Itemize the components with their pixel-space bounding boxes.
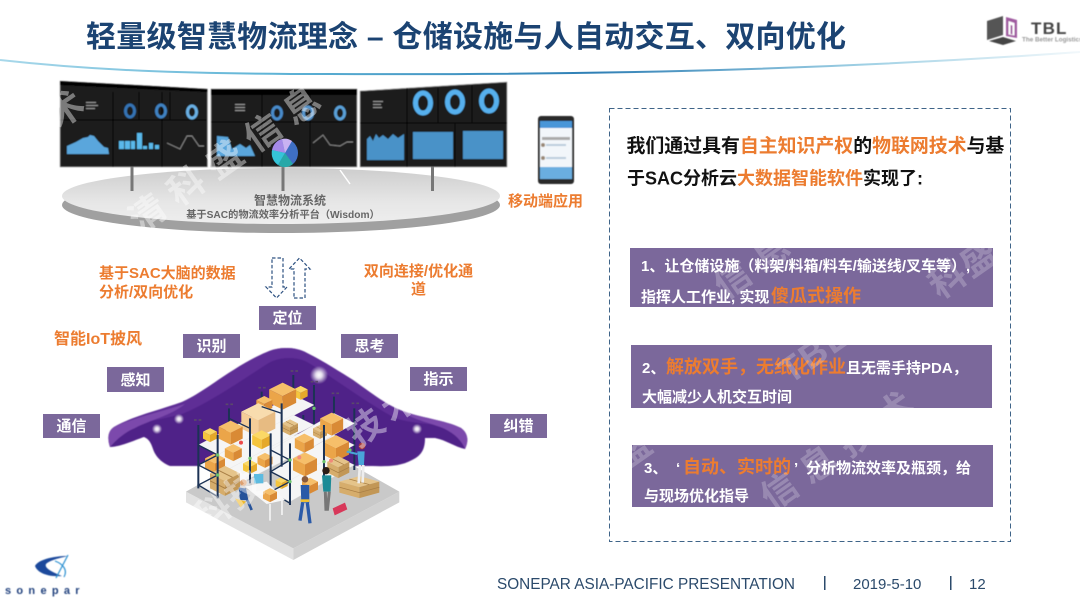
tag: sense [107, 367, 164, 392]
item 3: 与现场优化指导 [644, 487, 749, 505]
tag: correct: 纠错 [503, 418, 534, 435]
item 2 [631, 345, 992, 408]
header curved rule [0, 52, 1080, 74]
monitor: middle [211, 89, 357, 167]
callout: two-way connection: 双向连接/优化通 [364, 262, 473, 280]
logo: sonepar: sonepar [5, 585, 85, 597]
tag: correct [490, 414, 547, 438]
callout: two-way connection: 道 [411, 280, 426, 298]
monitor: right [360, 82, 507, 167]
illustration: warehouse [186, 371, 399, 560]
item 3 [632, 445, 993, 507]
watermark: 术 [39, 82, 92, 137]
arrow: dashed down [266, 258, 287, 298]
watermark: 技术 [339, 373, 431, 455]
warehouse floor [186, 432, 399, 560]
item 2: 解放双手，无纸化作业 [666, 356, 846, 377]
title: 轻量级智慧物流理念 – 仓储设施与人自动交互、双向优化 [86, 20, 846, 54]
icon: mobile phone [538, 116, 574, 184]
footer separators [824, 576, 952, 590]
tag: identify: 识别 [196, 338, 227, 355]
tag: positioning [259, 306, 316, 330]
item 1: 1、让仓储设施（料架/料箱/料车/输送线/叉车等）, [641, 257, 970, 275]
item 1: 傻瓜式操作 [771, 286, 861, 306]
item 3: 3、 [644, 460, 667, 477]
callout: SAC brain analysis: 基于SAC大脑的数据 [99, 264, 236, 282]
logo: TBL [987, 16, 1080, 45]
watermark: 信息技 [706, 192, 845, 307]
worker: blue overalls [300, 476, 310, 523]
item 3: ‘ [676, 460, 680, 477]
item 3: ’ [794, 460, 798, 477]
item 2: 且无需手持PDA， [846, 360, 968, 377]
panel intro text: 于SAC分析云大数据智能软件实现了: [627, 168, 923, 188]
panel: benefits [610, 108, 1010, 542]
watermark: 科盛 [921, 229, 1007, 307]
item 2: 大幅减少人机交互时间 [642, 388, 792, 406]
platform caption [186, 192, 380, 221]
rack: front posts and braces [194, 371, 360, 505]
watermark: 信息技术 [753, 377, 931, 519]
panel intro text [626, 135, 1004, 188]
item 1: 指挥人工作业, 实现 [641, 289, 769, 306]
worker: teal shirt [322, 467, 347, 515]
watermark: 科技 [186, 461, 272, 539]
platform caption: 基于SAC的物流效率分析平台（Wisdom） [186, 208, 380, 221]
callout: SAC brain analysis: 分析/双向优化 [99, 283, 193, 301]
watermark: 盛 [606, 422, 659, 477]
tag: identify [183, 334, 240, 358]
tag: communicate: 通信 [56, 417, 87, 435]
item 3: 自动、实时的 [683, 456, 791, 477]
arrow: dashed up [289, 258, 310, 298]
tag: instruct [410, 367, 467, 391]
tag: think [341, 334, 398, 358]
item 1 [630, 248, 993, 307]
platform disc [62, 166, 500, 233]
cartons on shelves [203, 383, 349, 496]
illustration: IoT cape [108, 348, 467, 466]
desk with worker [235, 474, 285, 521]
watermark [39, 72, 1007, 539]
label: IoT cape: 智能IoT披风 [54, 329, 142, 348]
tag: positioning: 定位 [272, 309, 303, 327]
item 2: 2、 [642, 360, 665, 377]
monitor: left [60, 81, 208, 167]
logo: sonepar [5, 555, 85, 597]
footer: presentation name: SONEPAR ASIA-PACIFIC PRESENTATION [497, 576, 795, 593]
label: mobile app: 移动端应用 [508, 192, 583, 210]
footer: page number: 12 [969, 576, 986, 593]
panel intro text: 我们通过具有自主知识产权的物联网技术与基 [626, 135, 1004, 157]
pie chart [272, 139, 298, 167]
footer: date: 2019-5-10 [853, 576, 921, 593]
watermark: 清科盛信息 [121, 72, 337, 241]
pallet stack [339, 476, 379, 498]
item 3: 分析物流效率及瓶颈，给 [806, 459, 971, 477]
rack: back posts and shelves [198, 375, 354, 502]
worker: on pallet [347, 443, 365, 483]
platform caption: 智慧物流系统 [254, 192, 326, 208]
tag: instruct: 指示 [423, 370, 454, 388]
tag: sense: 感知 [120, 371, 151, 389]
logo: TBL: TBL [1031, 19, 1068, 38]
tag: communicate [43, 414, 100, 438]
watermark: TBL [771, 314, 857, 392]
tag: think: 思考 [354, 338, 385, 355]
dashboard platform with monitors [60, 81, 507, 233]
